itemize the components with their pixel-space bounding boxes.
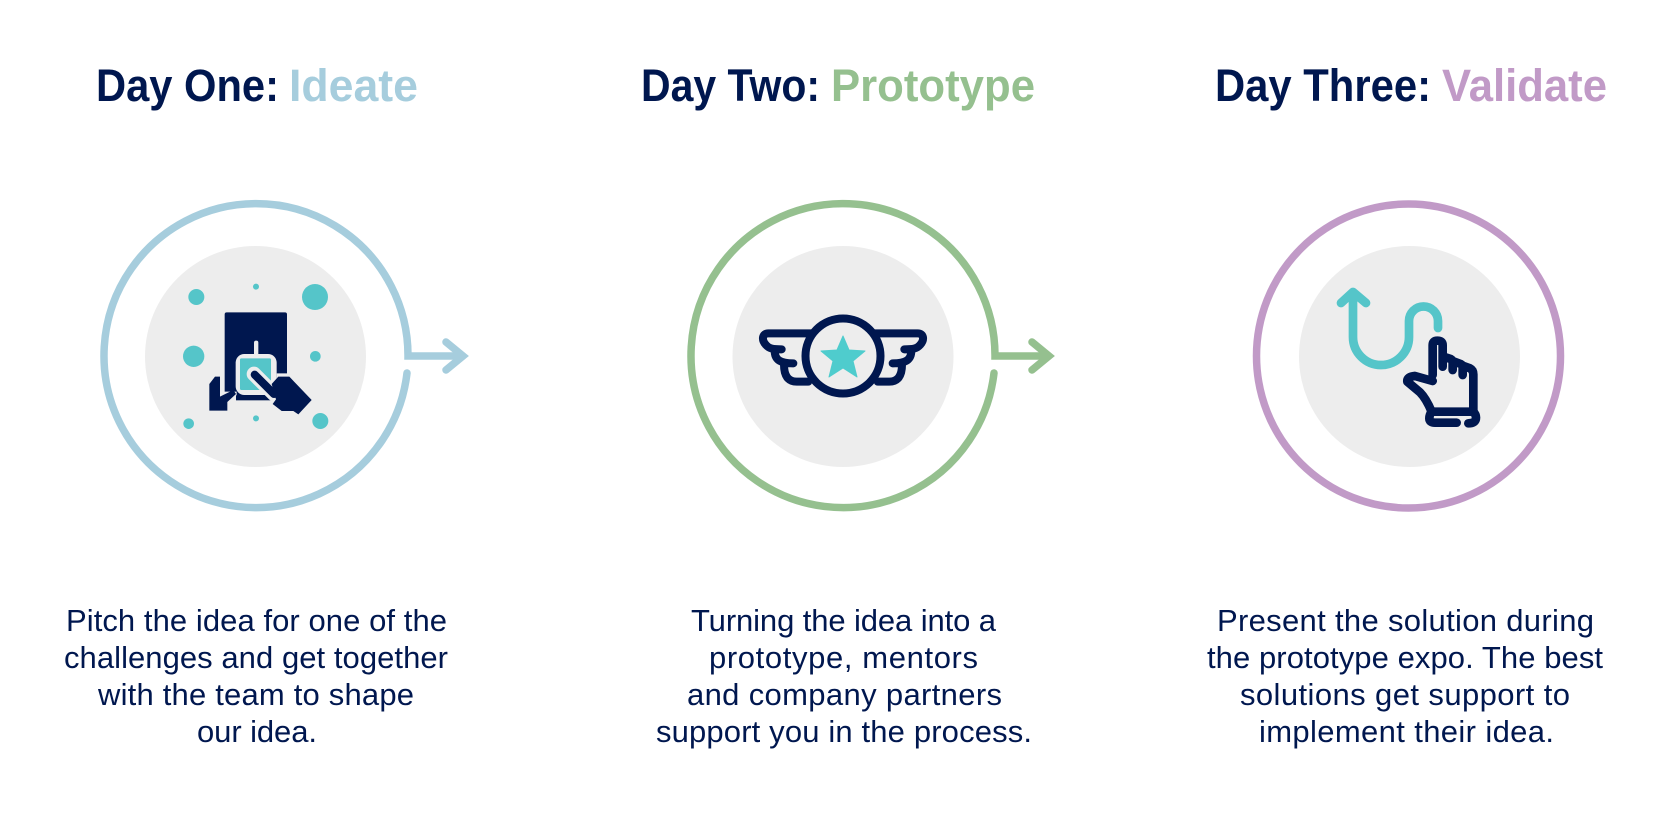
badge ring [806,318,880,394]
text block: Day Two [656,603,1032,749]
heading: Day One: Ideate [289,60,418,111]
right hand [254,374,312,414]
dots [183,284,328,429]
text block: Day Two: support you in the process. [656,714,1032,749]
grey disc: Day One [145,246,366,467]
heading: Day Three [1215,60,1607,111]
icon: tablet with hands and dots [183,284,328,429]
grey disc: Day Three [1299,246,1520,467]
heading: Day Two: Day Two: [641,60,820,111]
text block: Day One: our idea. [197,714,317,749]
text block: Day Three [1207,603,1603,749]
icon: swipe gesture hand [1341,292,1476,423]
text block: Day One: with the team to shape [97,677,414,712]
teal path arrow [1341,292,1438,365]
star [821,336,865,377]
left hand [209,377,236,411]
text block: Day Two: Turning the idea into a [691,603,997,638]
left wing [763,333,812,382]
heading: Day Two [641,60,1035,111]
text block: Day Three: implement their idea. [1259,714,1554,749]
text block: Day One: Pitch the idea for one of the [66,603,447,638]
ring: Day Three [1256,204,1560,508]
grey disc: Day Two [732,246,954,467]
text block: Day Two: and company partners [687,677,1002,712]
text block: Day Three: Present the solution during [1217,603,1594,638]
text block: Day One: challenges and get together [64,640,448,675]
heading: Day Two: Prototype [831,60,1035,111]
heading: Day Three: Validate [1442,60,1607,111]
text block: Day Two: prototype, mentors [709,640,978,675]
touch square [236,341,277,400]
heading: Day One [96,60,418,111]
ring with arrow: Day Two [691,204,1049,508]
right wing [874,333,923,382]
text block: Day Three: solutions get support to [1240,677,1570,712]
ring with arrow: Day One [104,204,463,508]
heading: Day Three: Day Three: [1215,60,1431,111]
icon: winged star badge [763,318,923,394]
heading: Day One: Day One: [96,60,279,111]
tablet [225,312,287,400]
text block: Day One [64,603,448,749]
hand [1407,341,1476,423]
text block: Day Three: the prototype expo. The best [1207,640,1603,675]
